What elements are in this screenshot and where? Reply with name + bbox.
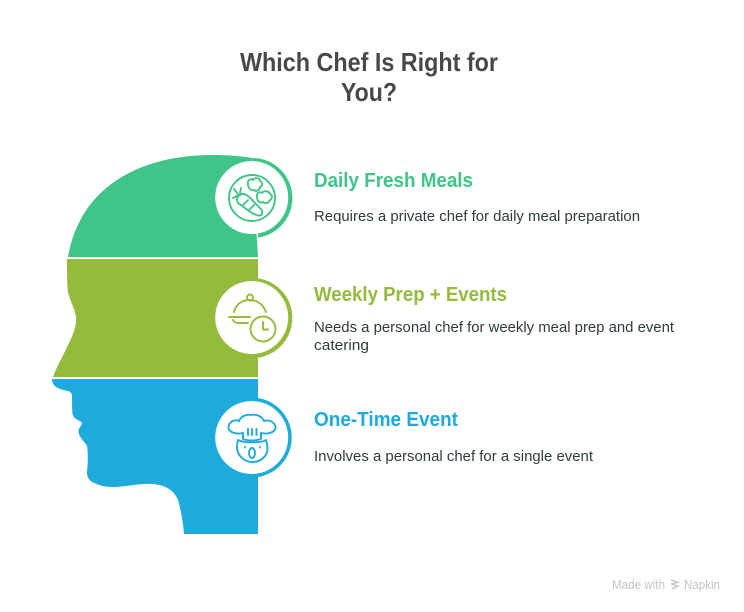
panel: weekly prep head section (53, 259, 292, 377)
text block: weekly prep and events: catering (314, 338, 369, 354)
panel: daily fresh meals head section (68, 155, 292, 257)
badge disc (215, 401, 288, 474)
badge ring (258, 278, 292, 358)
icon: carrot and broccoli (229, 175, 275, 221)
text block: one-time event (314, 409, 593, 465)
icon: cloche and clock (229, 294, 276, 342)
text block: daily fresh meals: Requires a private chef for daily meal preparation (314, 209, 640, 225)
title (240, 47, 498, 107)
head lower shape (52, 379, 258, 534)
footer: made with napkin: Napkin (684, 578, 720, 592)
text block: daily fresh meals (314, 170, 640, 225)
text block: weekly prep and events: Weekly Prep + Events (314, 284, 507, 306)
badge disc (215, 281, 288, 354)
text block: weekly prep and events: Needs a personal chef for weekly meal prep and event (314, 320, 674, 336)
icon: napkin logo (671, 580, 678, 589)
footer: made with napkin: Made with (612, 578, 665, 592)
badge ring (258, 398, 292, 477)
title: You? (341, 77, 397, 107)
head middle shape (53, 259, 258, 377)
text block: one-time event: One-Time Event (314, 409, 458, 431)
text block: weekly prep and events (314, 284, 674, 354)
text block: daily fresh meals: Daily Fresh Meals (314, 170, 473, 192)
panel: one-time event head section (52, 379, 292, 534)
title: Which Chef Is Right for (240, 47, 498, 77)
badge disc (215, 161, 288, 234)
icon: surprised chef (228, 415, 276, 462)
text block: one-time event: Involves a personal chef for a single event (314, 449, 593, 465)
footer: made with napkin (612, 578, 720, 592)
badge ring (252, 158, 292, 238)
head crown shape (68, 155, 258, 257)
